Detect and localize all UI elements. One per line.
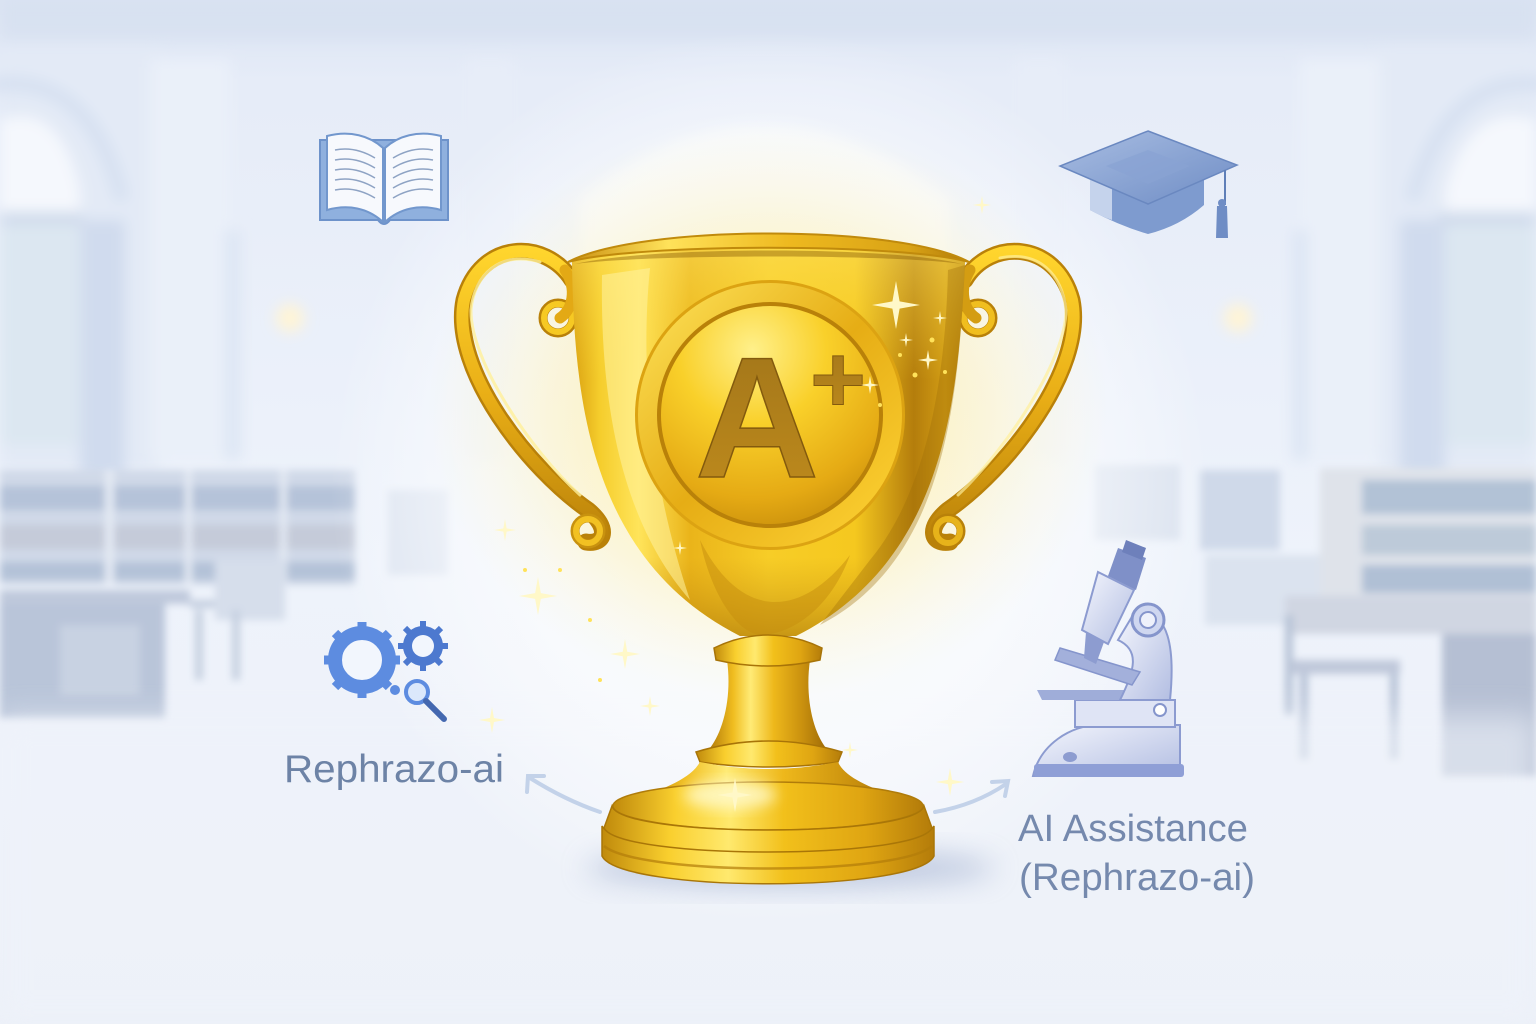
arrow: right <box>935 781 1008 812</box>
icon: microscope <box>1033 540 1184 777</box>
bowl <box>572 242 965 636</box>
medal: + <box>810 326 866 433</box>
trophy shadow <box>585 848 995 888</box>
label: AI Assistance (Rephrazo-ai): (Rephrazo-ai) <box>1019 857 1255 899</box>
label: AI Assistance (Rephrazo-ai): AI Assistance <box>1018 808 1248 850</box>
trophy <box>462 234 1074 884</box>
shelves left <box>0 470 448 718</box>
label: AI Assistance (Rephrazo-ai) <box>1018 808 1255 899</box>
icon: gears and magnifier <box>324 621 448 719</box>
foot <box>628 762 910 802</box>
left handle <box>462 251 602 544</box>
medal <box>635 280 905 550</box>
label: Rephrazo-ai: Rephrazo-ai <box>284 748 504 791</box>
bowl highlights <box>602 268 690 600</box>
stem <box>710 660 826 748</box>
floor wash <box>0 715 1536 1024</box>
letter grade: A <box>695 322 819 514</box>
trophy glow <box>428 120 1108 700</box>
right handle <box>934 251 1074 544</box>
icon: graduation cap <box>1060 131 1237 238</box>
shelves right <box>1095 465 1536 776</box>
collar <box>696 741 842 767</box>
sparkles <box>479 196 991 812</box>
icon: open book <box>320 134 448 224</box>
rim <box>568 234 969 262</box>
arrow: left <box>527 776 600 812</box>
